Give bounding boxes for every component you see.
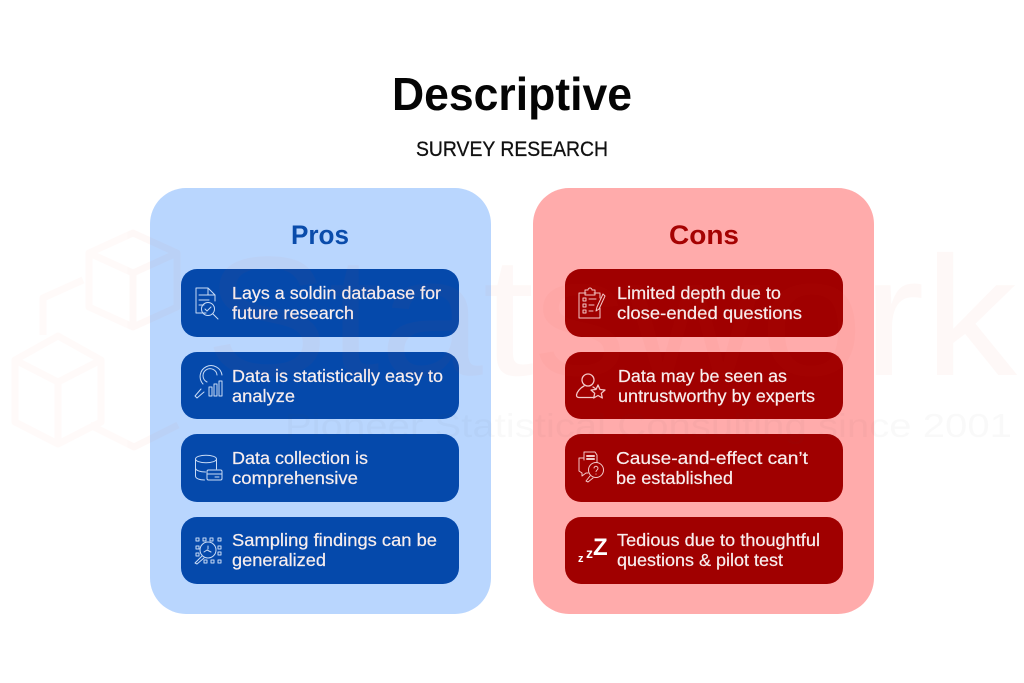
card: solid database: future research [232,303,354,323]
card: untrustworthy: untrustworthy by experts [618,386,815,406]
card: solid database: Lays a soldin database for [232,283,441,303]
panel: cons [533,188,874,614]
card: untrustworthy: Data may be seen as [618,366,787,386]
icon: magnifier with bars [195,366,222,398]
card: tedious: questions & pilot test [617,550,783,570]
icon: sleep zzz: z [578,553,584,565]
card: untrustworthy [565,352,843,419]
watermark wordmark: Statswork [205,222,1018,412]
watermark tagline: Pioneer Statistical Consulting since 2001 [285,407,1012,444]
icon: sleep zzz: Z [593,534,608,561]
card: comprehensive collection [181,434,459,502]
card: generalized findings: generalized [232,550,326,570]
card: limited depth: close-ended questions [617,303,802,323]
card: generalized findings [181,517,459,584]
card: generalized findings: Sampling findings can be [232,530,437,550]
subtitle: SURVEY RESEARCH [416,138,608,161]
icon: clipboard [579,288,605,318]
watermark [15,222,1018,447]
icon: sleep zzz [578,534,608,565]
heading: cons: Cons [669,220,739,250]
card: cause and effect: be established [616,468,733,488]
watermark logo: cubes [15,233,178,447]
title: Descriptive [392,68,632,120]
card: easy to analyze [181,352,459,419]
card: solid database [181,269,459,337]
card: comprehensive collection: comprehensive [232,468,358,488]
icon: document search [196,288,218,319]
card: easy to analyze: Data is statistically easy to [232,366,443,386]
card: tedious [565,517,843,584]
icon: sampling grid [195,538,221,564]
card: cause and effect: Cause-and-effect can’t [616,448,808,468]
icon: database [196,455,222,480]
icon: person with star [576,374,605,398]
icon: sleep zzz: z [586,545,593,561]
panel: pros [150,188,491,614]
card: limited depth: Limited depth due to [617,283,781,303]
card: easy to analyze: analyze [232,386,295,406]
heading: pros: Pros [291,220,349,250]
card: comprehensive collection: Data collection is [232,448,368,468]
icon: documents with question [579,452,604,482]
card: tedious: Tedious due to thoughtful [617,530,820,550]
card: limited depth [565,269,843,337]
card: cause and effect [565,434,843,502]
